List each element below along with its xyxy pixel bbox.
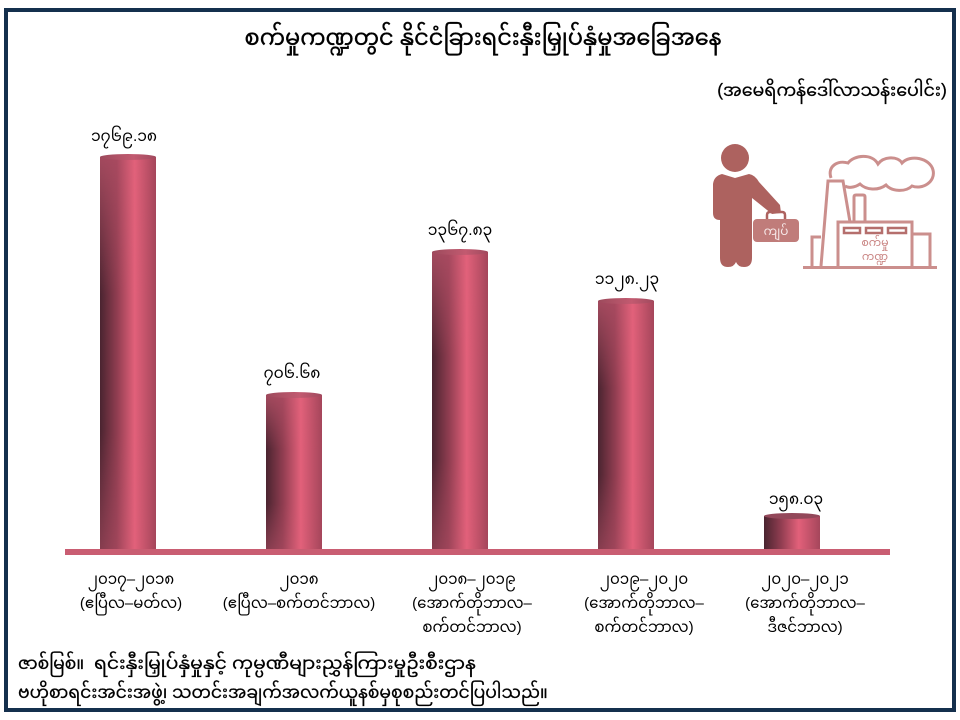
axis baseline <box>65 549 890 555</box>
category label 5: (အောက်တိုဘာလ– <box>745 595 865 612</box>
bar 3 <box>432 249 488 550</box>
category label 3: စက်တင်ဘာလ) <box>422 619 522 636</box>
category label 4 <box>584 571 704 636</box>
value: bar 3: ၁၃၆၇.၈၃ <box>428 222 492 239</box>
value: bar 5: ၁၅၈.၀၃ <box>769 491 823 508</box>
category label 2 <box>223 571 375 616</box>
category label 3 <box>412 571 532 636</box>
source note <box>18 651 548 706</box>
bar 4 <box>598 298 654 550</box>
category label 1 <box>80 571 182 616</box>
category label 5: ဒီဇင်ဘာလ) <box>767 619 843 636</box>
category label 2: (ဧပြီလ–စက်တင်ဘာလ) <box>223 595 375 612</box>
category label 1: ၂၀၁၇–၂၀၁၈ <box>88 571 174 588</box>
value: bar 1: ၁၇၆၉.၁၈ <box>91 128 157 145</box>
value: bar 2: ၇၀၆.၆၈ <box>264 365 320 382</box>
category label 4: (အောက်တိုဘာလ– <box>584 595 704 612</box>
briefcase label: ကျပ် <box>764 222 788 241</box>
category label 2: ၂၀၁၈ <box>279 571 319 588</box>
category label 5: ၂၀၂၀–၂၀၂၁ <box>761 571 849 588</box>
category label 5 <box>745 571 865 636</box>
bar chart <box>65 154 890 555</box>
icon: factory with smoke: ကဏ္ဍ <box>862 251 888 266</box>
unit note: (အမေရိကန်ဒေါ်လာသန်းပေါင်း) <box>717 80 947 100</box>
source note: ရင်းနှီးမြှုပ်နှံမှုနှင့် ကုမ္ပဏီများညွှန်ကြားမှုဦးစီးဌာန <box>94 653 476 673</box>
category label 4: ၂၀၁၉–၂၀၂၀ <box>600 571 688 588</box>
title: စက်မှုကဏ္ဍတွင် နိုင်ငံခြားရင်းနှီးမြှုပ်နှံမှုအခြေအနေ <box>245 25 721 50</box>
icon: businessman with briefcase <box>713 144 799 267</box>
category label 4: စက်တင်ဘာလ) <box>594 619 694 636</box>
icon: factory with smoke <box>803 154 937 269</box>
bar 2 <box>266 392 322 550</box>
category label 3: (အောက်တိုဘာလ– <box>412 595 532 612</box>
value: bar 4: ၁၁၂၈.၂၃ <box>595 271 659 288</box>
bar 5 <box>764 513 820 550</box>
bar 1 <box>100 154 156 550</box>
category label 3: ၂၀၁၈–၂၀၁၉ <box>428 571 516 588</box>
factory label: စက်မှု <box>861 235 889 251</box>
category label 1: (ဧပြီလ–မတ်လ) <box>80 595 182 612</box>
source note: ဇာစ်မြစ်။ <box>18 653 84 673</box>
source note: ဗဟိုစာရင်းအင်းအဖွဲ့၊ သတင်းအချက်အလက်ယူနစ်မှစုစည်းတင်ပြပါသည်။ <box>18 682 548 702</box>
